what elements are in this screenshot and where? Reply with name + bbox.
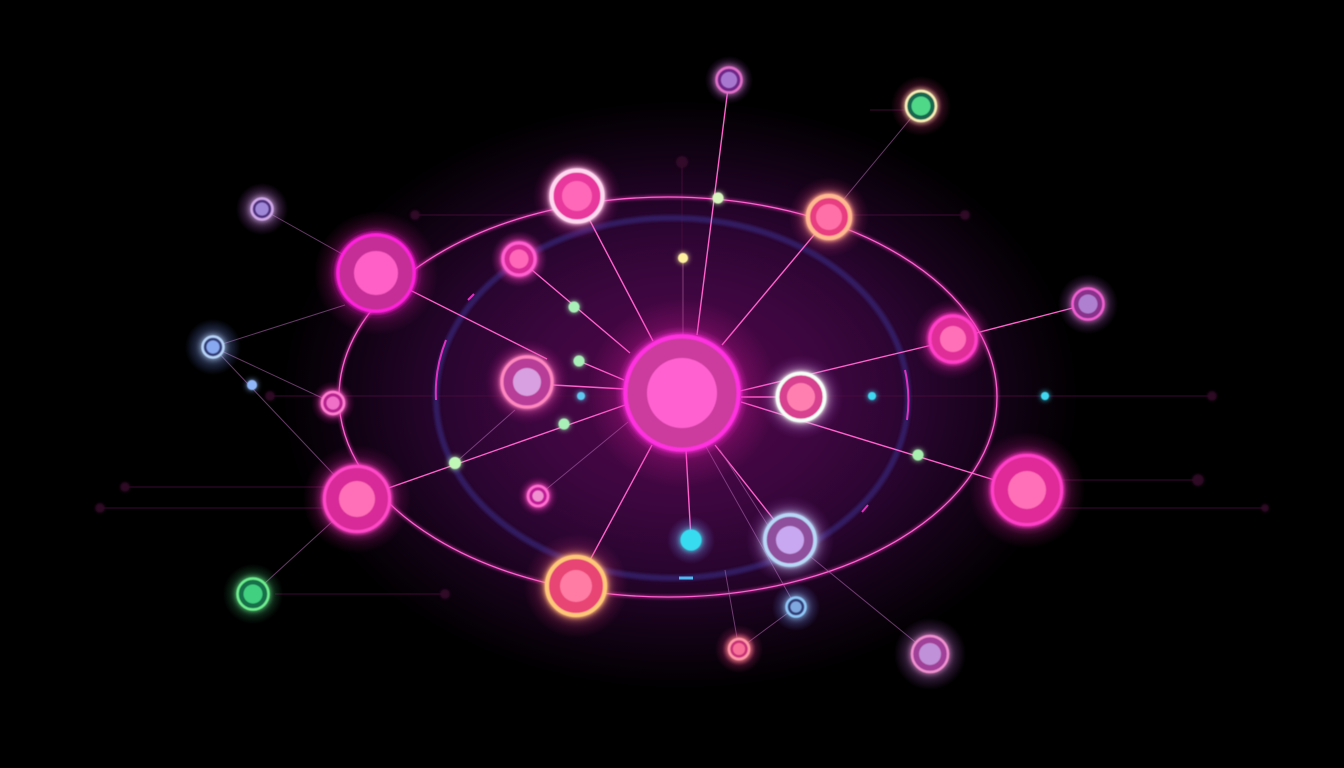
faint background lines xyxy=(95,110,1269,599)
small bright dots xyxy=(247,192,1049,550)
dim outer links xyxy=(213,106,930,654)
connector lines xyxy=(357,80,1088,586)
large and medium nodes xyxy=(324,170,1062,615)
small outer nodes xyxy=(202,68,1104,672)
glows xyxy=(185,56,1118,690)
outer orbit ring xyxy=(339,197,997,597)
central hub node xyxy=(626,336,738,450)
inner orbit ring xyxy=(436,218,908,578)
